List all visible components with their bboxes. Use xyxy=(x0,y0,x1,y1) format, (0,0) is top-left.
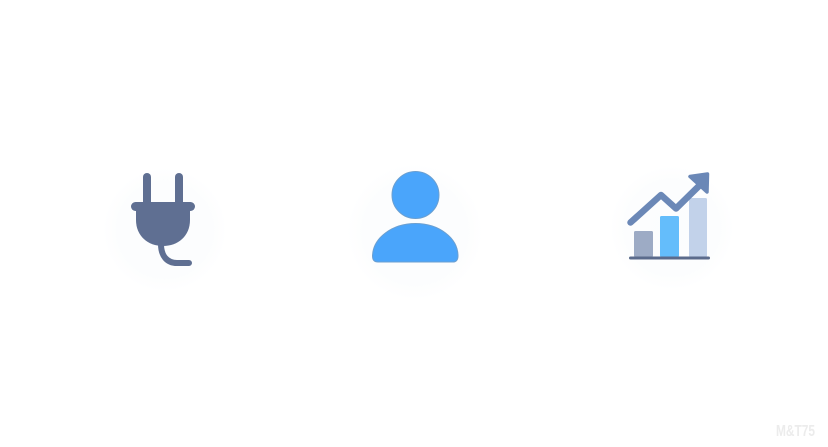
bar 2 xyxy=(660,216,679,257)
plug prongs xyxy=(143,173,183,207)
icon: growth chart xyxy=(610,166,734,290)
trend arrowhead xyxy=(690,174,708,192)
watermark: M&T75 xyxy=(776,423,815,440)
bar 3 xyxy=(689,198,707,257)
chart baseline xyxy=(629,256,710,260)
plug cord xyxy=(161,244,189,263)
plug flange xyxy=(131,202,195,211)
person shoulders xyxy=(372,224,458,262)
icon: electric plug xyxy=(103,168,227,292)
trend line xyxy=(630,183,702,222)
person head xyxy=(392,172,439,218)
plug body xyxy=(136,206,190,246)
bar 1 xyxy=(634,231,653,257)
icon: person xyxy=(347,164,483,300)
